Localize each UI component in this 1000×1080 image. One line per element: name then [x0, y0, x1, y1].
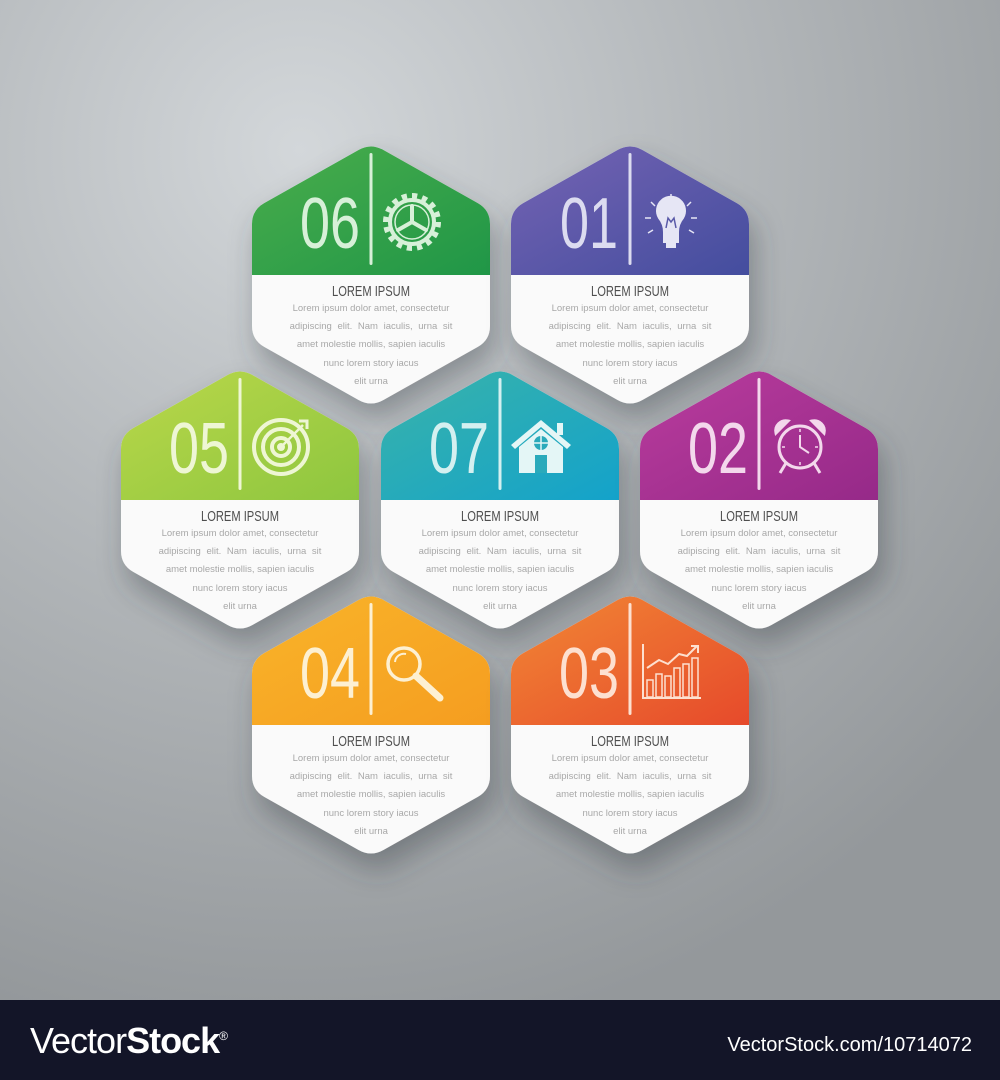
hexagon 04: [246, 590, 496, 854]
footer url: VectorStock.com/10714072: [727, 1034, 972, 1056]
hexagon 02: [634, 365, 884, 629]
number 07: 07: [429, 409, 489, 489]
number 02: 02: [688, 409, 748, 489]
icon: gear: [387, 197, 437, 247]
infographic hexagons: [110, 146, 896, 878]
hexagon 01: [505, 140, 755, 404]
icon: light bulb: [645, 194, 697, 247]
number 03: 03: [559, 634, 619, 714]
icon: house: [511, 420, 571, 473]
footer logo: VectorStock®: [30, 1020, 227, 1061]
footer bar: [0, 1000, 1000, 1080]
number 01: 01: [560, 184, 618, 264]
icon: bar chart: [643, 644, 701, 698]
hexagon 05: [115, 365, 365, 629]
hexagon 07: [375, 365, 625, 629]
hexagon 03: [505, 590, 755, 854]
number 06: 06: [300, 184, 360, 264]
icon: magnifier: [388, 648, 440, 698]
icon: target: [254, 420, 308, 474]
hexagon 06: [246, 140, 496, 404]
number 05: 05: [169, 409, 229, 489]
number 04: 04: [300, 634, 360, 714]
icon: alarm clock: [776, 421, 824, 473]
